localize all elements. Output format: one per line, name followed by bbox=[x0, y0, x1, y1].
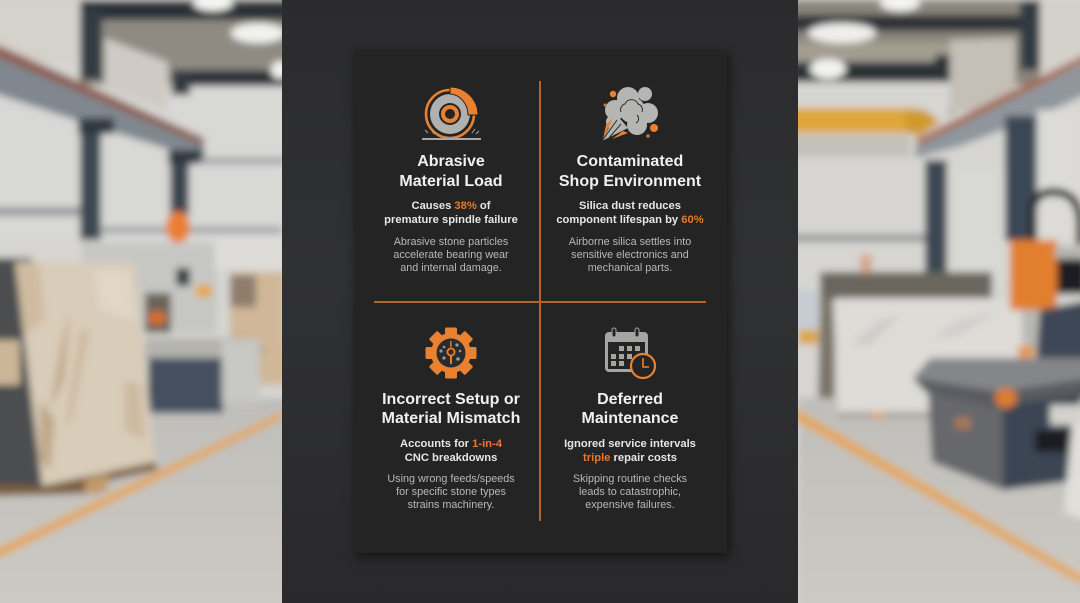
panel: contaminated shop environment bbox=[556, 87, 704, 274]
horizontal orange divider bbox=[374, 301, 706, 303]
heading: Material Load bbox=[399, 172, 503, 190]
description: Skipping routine checks bbox=[573, 473, 687, 485]
description bbox=[568, 236, 691, 274]
description: and internal damage. bbox=[400, 262, 502, 274]
icon: dust cloud bbox=[602, 87, 658, 141]
statistic: Ignored service intervals bbox=[564, 438, 696, 450]
heading: Incorrect Setup or bbox=[382, 390, 520, 408]
statistic bbox=[564, 438, 696, 464]
heading: Contaminated bbox=[577, 153, 683, 170]
panel: abrasive material load bbox=[384, 88, 518, 274]
description: accelerate bearing wear bbox=[393, 249, 509, 261]
icon: calendar and clock bbox=[605, 328, 656, 380]
statistic bbox=[556, 200, 704, 226]
panel: incorrect setup or material mismatch bbox=[382, 328, 520, 511]
heading: Maintenance bbox=[582, 410, 678, 427]
slabs bbox=[0, 258, 45, 495]
icon: gear bbox=[426, 328, 476, 378]
heading: Abrasive bbox=[417, 153, 485, 170]
statistic: Silica dust reduces bbox=[579, 200, 681, 212]
heading: Shop Environment bbox=[559, 172, 701, 190]
description bbox=[573, 473, 687, 511]
poster board bbox=[354, 50, 727, 553]
statistic: CNC breakdowns bbox=[405, 452, 497, 464]
statistic: Accounts for 1-in-4 bbox=[400, 438, 502, 450]
description: Abrasive stone particles bbox=[394, 236, 508, 248]
statistic: triple repair costs bbox=[583, 452, 677, 464]
heading bbox=[582, 390, 678, 427]
statistic bbox=[400, 438, 502, 464]
left machine bbox=[82, 243, 217, 333]
statistic: Causes 38% of bbox=[412, 200, 490, 212]
left side bbox=[80, 0, 290, 85]
description: expensive failures. bbox=[585, 499, 675, 511]
heading: Material Mismatch bbox=[382, 410, 520, 427]
statistic: component lifespan by 60% bbox=[556, 214, 704, 226]
description: for specific stone types bbox=[396, 486, 506, 498]
description: sensitive electronics and bbox=[571, 249, 689, 261]
description: leads to catastrophic, bbox=[579, 486, 681, 498]
heading bbox=[382, 390, 520, 427]
icon: grinding wheel bbox=[422, 88, 481, 140]
vertical orange divider bbox=[539, 81, 541, 521]
heading bbox=[399, 153, 503, 190]
statistic: premature spindle failure bbox=[384, 214, 518, 226]
description bbox=[387, 473, 515, 511]
description: mechanical parts. bbox=[588, 262, 672, 274]
heading bbox=[559, 153, 701, 190]
panel: deferred maintenance bbox=[564, 328, 696, 511]
description: Airborne silica settles into bbox=[569, 236, 691, 248]
description: strains machinery. bbox=[408, 499, 494, 511]
dark backing panel bbox=[282, 0, 798, 603]
floor bbox=[0, 398, 290, 603]
heading: Deferred bbox=[597, 390, 663, 408]
description bbox=[393, 236, 509, 274]
statistic bbox=[384, 200, 518, 226]
description: Using wrong feeds/speeds bbox=[387, 473, 515, 485]
right side bbox=[790, 0, 1040, 85]
